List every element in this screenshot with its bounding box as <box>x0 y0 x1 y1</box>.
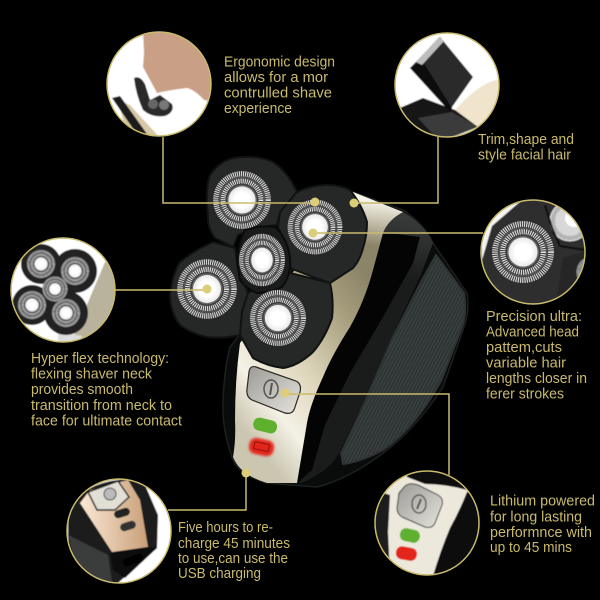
foil heads <box>177 171 343 346</box>
callout connector lines <box>115 137 483 510</box>
text: ergonomic design: Ergonomic design <box>224 54 335 70</box>
inset: ergonomic use <box>106 31 212 137</box>
cream highlight <box>350 192 403 250</box>
text: lithium: performnce with <box>490 524 592 541</box>
inset: power panel <box>374 470 480 576</box>
text: five hours: charge 45 minutes <box>178 535 290 552</box>
cream front panel <box>233 192 403 483</box>
text: precision ultra: ferer strokes <box>486 386 564 402</box>
text: hyper flex: Hyper flex technology: <box>31 350 169 367</box>
text: precision ultra: Precision ultra: <box>486 308 582 325</box>
green indicator <box>252 416 278 435</box>
red indicator <box>248 437 275 458</box>
shaver head lobes <box>170 157 367 368</box>
text: precision ultra: pattem,cuts <box>486 339 562 356</box>
inset: flex heads <box>10 235 120 345</box>
centre head housing <box>237 226 290 293</box>
text: five hours: USB charging <box>178 565 261 582</box>
text: precision ultra: Advanced head <box>486 324 579 340</box>
text: hyper flex: transition from neck to <box>31 397 172 414</box>
text: lithium: for long lasting <box>490 508 582 526</box>
text: precision ultra: variable hair <box>486 354 566 372</box>
text: hyper flex: provides smooth <box>31 381 133 398</box>
text: trim: Trim,shape and <box>478 131 574 148</box>
text: precision ultra: lengths closer in <box>486 370 587 387</box>
ribbed side grip <box>341 255 465 464</box>
dark centre panel <box>297 233 420 483</box>
inset: trimmer <box>394 32 500 138</box>
text: trim: style facial hair <box>478 146 571 164</box>
text: ergonomic design: allows for a mor <box>224 69 328 86</box>
inset: precision head <box>480 199 586 305</box>
inset: charging port <box>65 478 175 585</box>
text: five hours: to use,can use the <box>178 550 288 567</box>
power button <box>247 367 300 413</box>
text: five hours: Five hours to re- <box>178 519 273 536</box>
text: lithium: Lithium powered <box>490 492 595 510</box>
shaver body <box>223 192 468 487</box>
glossy shoulder <box>300 212 433 484</box>
text: lithium: up to 45 mins <box>490 539 572 556</box>
connector dots <box>202 198 358 478</box>
text: ergonomic design: contrulled shave <box>224 84 332 102</box>
text: hyper flex: face for ultimate contact <box>31 412 183 430</box>
text: hyper flex: flexing shaver neck <box>31 366 152 382</box>
text: ergonomic design: experience <box>224 100 292 117</box>
shaver product <box>170 157 468 487</box>
